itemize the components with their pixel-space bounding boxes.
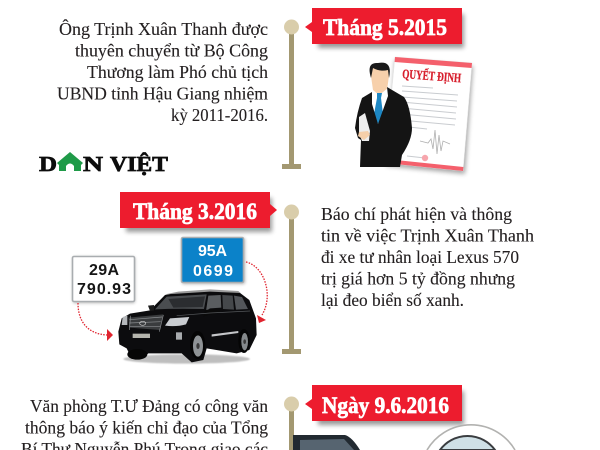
timeline post 2 (282, 204, 301, 354)
logo: Dân Việt: N (83, 152, 103, 176)
text block: Thanh transfer 2015: thuyên chuyển từ Bộ Công (75, 40, 268, 60)
date tag: Tháng 3.2016: Tháng 3.2016 (133, 199, 257, 224)
text block: Lexus blue plate (321, 204, 534, 310)
logo: Dân Việt: VIỆT (110, 152, 168, 176)
logo: Dân Việt: D (39, 152, 57, 176)
text block: Thanh transfer 2015: UBND tỉnh Hậu Giang nhiệm (57, 84, 268, 104)
timeline post 1 (282, 20, 301, 169)
illustration: decision document (385, 57, 473, 174)
date tag: Ngày 9.6.2016: Ngày 9.6.2016 (322, 393, 449, 418)
illustration: dark car (293, 435, 360, 450)
text block: Lexus blue plate: trị giá hơn 5 tỷ đồng nhưng (321, 268, 515, 288)
text block: Thanh transfer 2015: Ông Trịnh Xuân Thanh được (59, 18, 268, 39)
text block: Lexus blue plate: Báo chí phát hiện và thông (321, 204, 512, 224)
date tag: Tháng 5.2015 (305, 8, 464, 48)
logo: Dân Việt (39, 152, 168, 176)
timeline post 3 (284, 396, 299, 450)
text block: Thanh transfer 2015: Thương làm Phó chủ tịch (87, 62, 268, 82)
text block: Thanh transfer 2015: kỳ 2011-2016. (171, 105, 268, 125)
number plate: blue 95A 0699 (182, 238, 245, 284)
illustration: black Lexus SUV (118, 289, 257, 364)
date tag: Ngày 9.6.2016 (305, 385, 464, 425)
text block: Party office letter (21, 396, 268, 450)
number plate: white 29A 790.93: 29A (89, 262, 119, 279)
text block: Lexus blue plate: đi xe tư nhân loại Lexus 570 (321, 247, 519, 267)
date tag: Tháng 3.2016 (120, 192, 277, 232)
date tag: Tháng 5.2015: Tháng 5.2015 (323, 15, 447, 40)
number plate: blue 95A 0699: 0699 (193, 263, 233, 280)
number plate: white 29A 790.93: 790.93 (77, 281, 131, 298)
number plate: white 29A 790.93 (72, 256, 135, 303)
illustration: decision document: QUYẾT ĐỊNH (402, 66, 462, 85)
text block: Thanh transfer 2015 (57, 18, 268, 125)
text block: Party office letter: Văn phòng T.Ư Đảng có công văn (30, 396, 268, 416)
text block: Lexus blue plate: tin về việc Trịnh Xuân Thanh (321, 226, 534, 246)
number plate: blue 95A 0699: 95A (198, 243, 227, 260)
arrow: white plate to car (78, 303, 113, 341)
illustration: magnifying glass (427, 425, 515, 450)
illustration: businessman (355, 63, 412, 167)
text block: Lexus blue plate: lại đeo biển số xanh. (321, 290, 464, 310)
text block: Party office letter: thông báo ý kiến chỉ đạo của Tổng (25, 418, 268, 438)
arrow: blue plate to car (246, 262, 267, 323)
